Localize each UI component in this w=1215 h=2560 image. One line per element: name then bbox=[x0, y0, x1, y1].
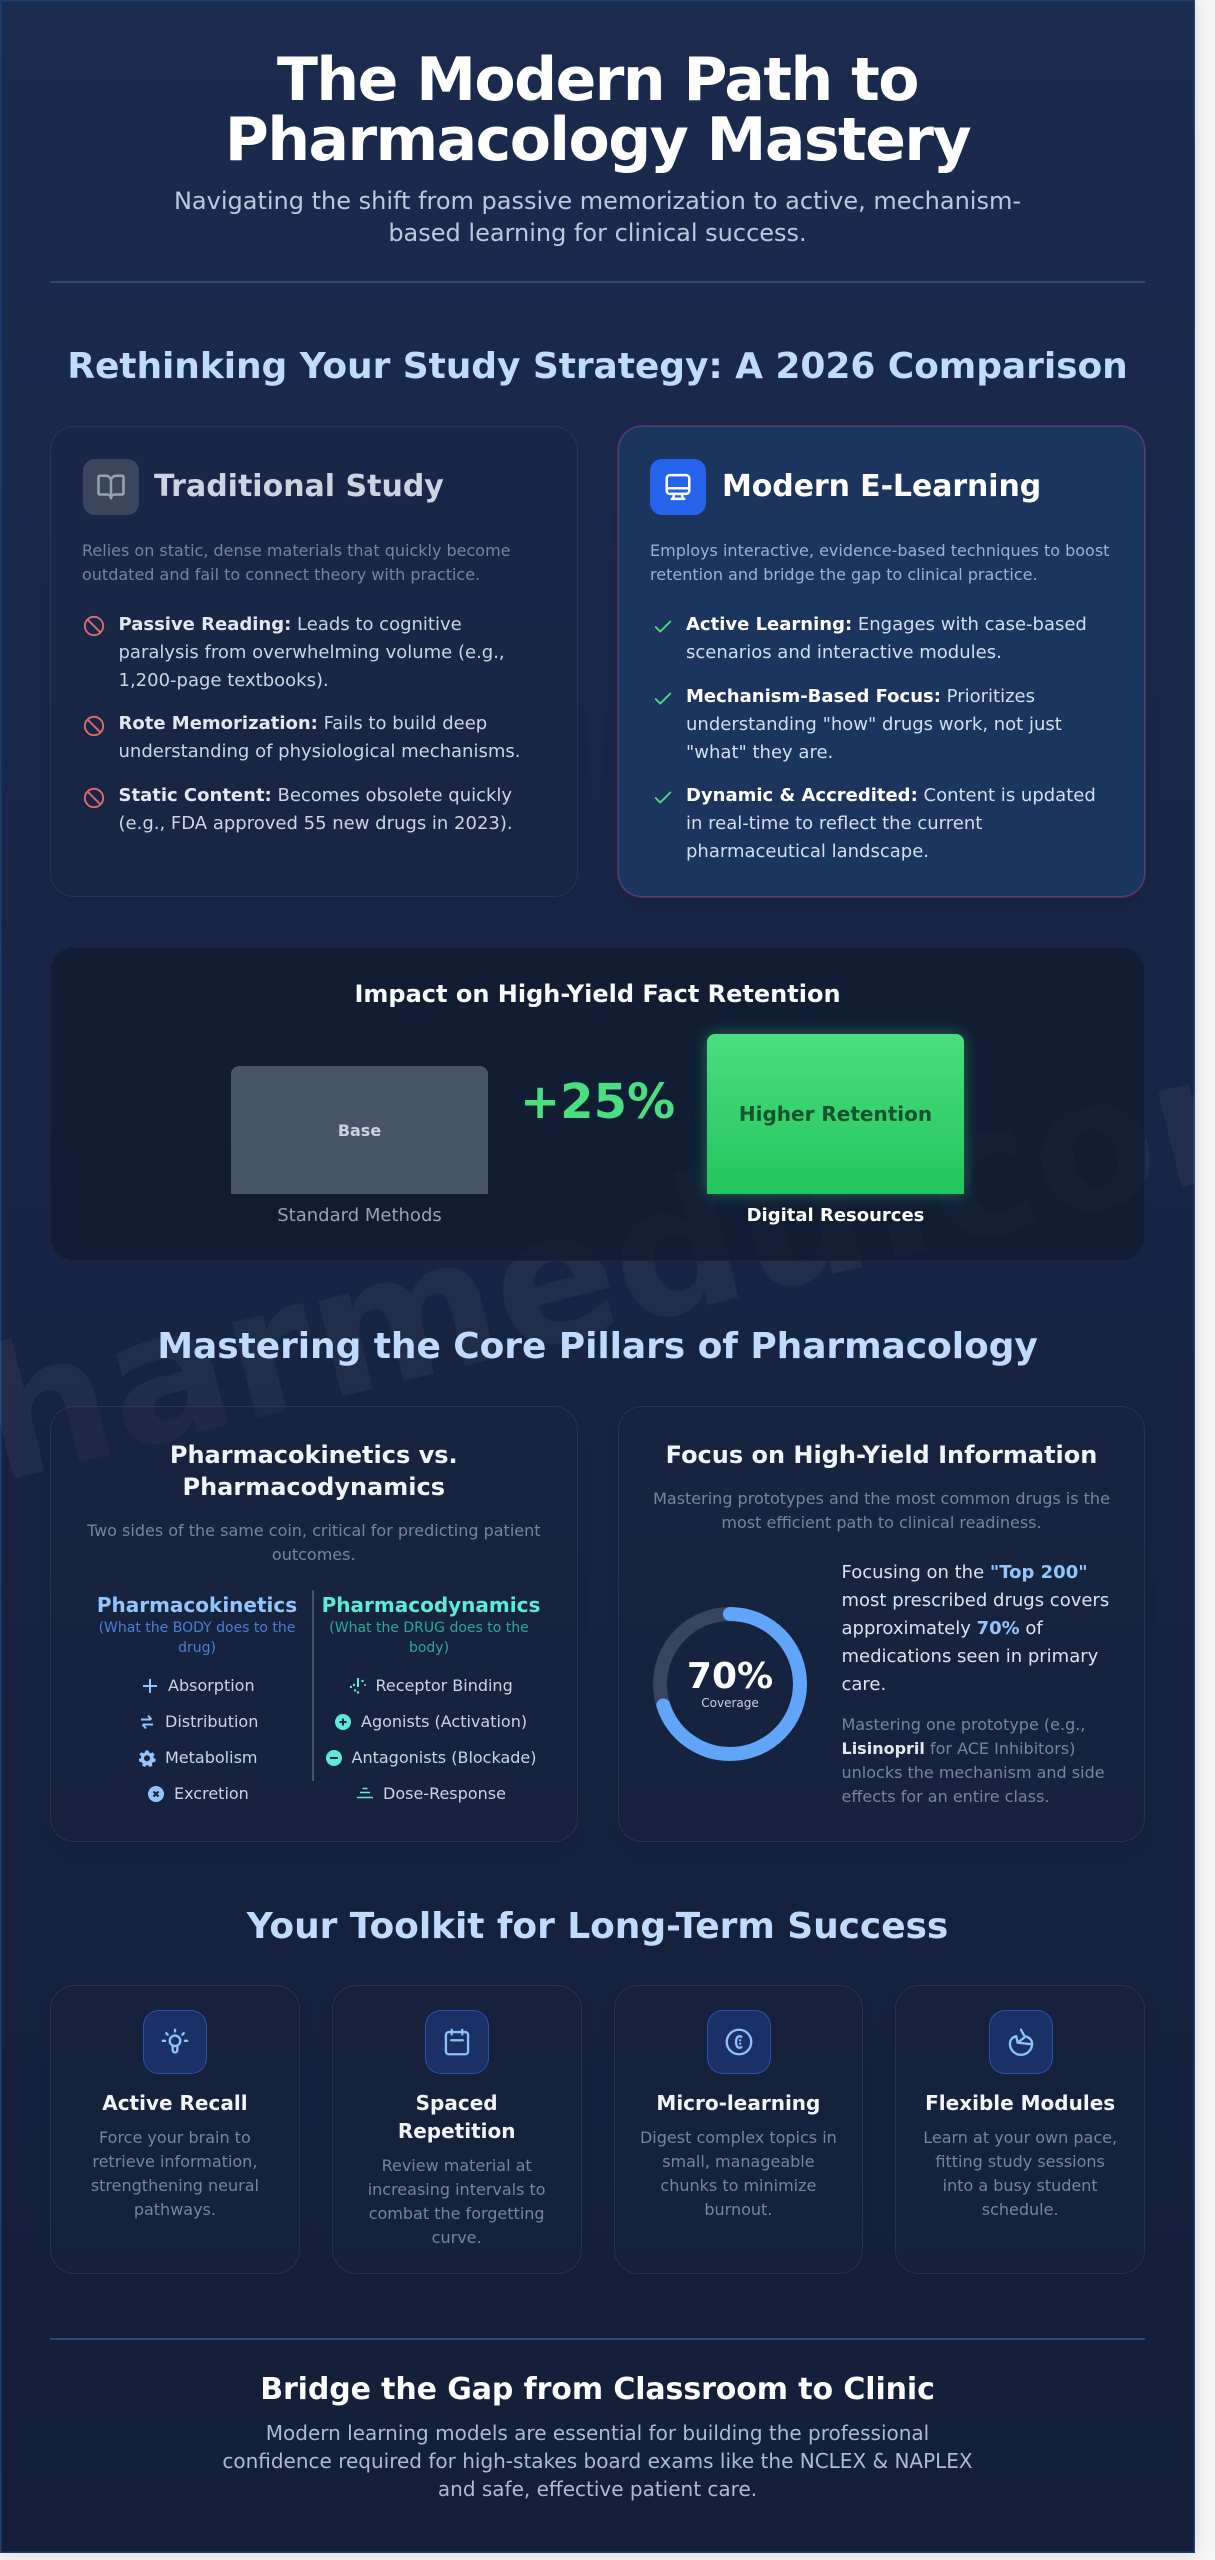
item: agonists: Agonists (Activation) bbox=[361, 1712, 527, 1730]
heading: core pillars: Mastering the Core Pillars of Pharmacology bbox=[157, 1326, 1038, 1366]
title: micro-learning: Micro-learning bbox=[656, 2090, 820, 2114]
item: excretion: Excretion bbox=[174, 1784, 249, 1802]
text: active recall: pathways. bbox=[134, 2200, 216, 2218]
list item: active learning bbox=[686, 614, 1087, 662]
icon: ban 1 bbox=[84, 616, 104, 636]
panel: traditional study bbox=[50, 426, 578, 897]
title: spaced repetition bbox=[398, 2090, 515, 2142]
title: spaced repetition: Spaced bbox=[416, 2090, 498, 2114]
text: pd subtitle: (What the DRUG does to the bbox=[329, 1620, 529, 1636]
title: Pharmacology Mastery bbox=[225, 104, 970, 174]
text: micro-learning: Digest complex topics in bbox=[640, 2128, 837, 2146]
heading: study strategy comparison: Rethinking Your Study Strategy: A 2026 Comparison bbox=[67, 346, 1128, 386]
icon: check 1 bbox=[654, 620, 672, 632]
text: top 200: most prescribed drugs covers bbox=[842, 1590, 1109, 1610]
axis label: standard methods: Standard Methods bbox=[277, 1205, 442, 1226]
subtitle: Navigating the shift from passive memorization to active, mechanism- bbox=[174, 187, 1021, 215]
bar label: base: Base bbox=[338, 1121, 381, 1140]
icon: monitor bbox=[650, 459, 706, 515]
title: flexible modules: Flexible Modules bbox=[925, 2090, 1115, 2114]
heading: toolkit: Your Toolkit for Long-Term Success bbox=[247, 1906, 948, 1946]
list item: mechanism-based focus bbox=[686, 686, 1062, 762]
list item: rote memorization bbox=[118, 712, 520, 762]
text: top 200: Focusing on the "Top 200" bbox=[842, 1562, 1088, 1582]
item: distribution: Distribution bbox=[165, 1712, 258, 1730]
text: micro-learning: small, manageable bbox=[662, 2152, 815, 2170]
footer text: confidence required for high-stakes board exams like the NCLEX & NAPLEX bbox=[222, 2449, 973, 2473]
text: micro-learning: chunks to minimize bbox=[660, 2176, 816, 2194]
text: top 200: approximately 70% of bbox=[842, 1618, 1043, 1638]
title: The Modern Path to bbox=[277, 44, 918, 114]
card: active recall bbox=[50, 1985, 300, 2274]
title: active recall: Active Recall bbox=[102, 2090, 248, 2114]
list item: active learning: scenarios and interactive modules. bbox=[686, 642, 1002, 662]
text: flexible modules: into a busy student bbox=[943, 2176, 1098, 2194]
list item: static content: (e.g., FDA approved 55 new drugs in 2023). bbox=[118, 812, 513, 834]
heading: traditional study: Traditional Study bbox=[154, 469, 444, 504]
item: dose-response: Dose-Response bbox=[383, 1784, 506, 1802]
text: pd subtitle bbox=[329, 1620, 529, 1656]
text: high-yield description bbox=[653, 1488, 1110, 1532]
text: pk vs pd description: outcomes. bbox=[272, 1544, 356, 1564]
panel: high-yield information bbox=[618, 1406, 1145, 1842]
text: top 200: care. bbox=[842, 1674, 886, 1694]
list item: passive reading: paralysis from overwhelming volume (e.g., bbox=[118, 642, 505, 662]
bar label: higher retention: Higher Retention bbox=[739, 1102, 932, 1126]
footer text: Modern learning models are essential for building the professional bbox=[266, 2421, 929, 2445]
column: pharmacokinetics bbox=[97, 1592, 297, 1802]
list item: static content bbox=[118, 784, 513, 834]
list item: dynamic and accredited bbox=[686, 784, 1096, 862]
text: flexible modules: Learn at your own pace, bbox=[923, 2128, 1117, 2146]
list item: mechanism-based focus: Mechanism-Based Focus: Prioritizes bbox=[686, 686, 1035, 706]
list item: mechanism-based focus: "what" they are. bbox=[686, 742, 833, 762]
footer text bbox=[222, 2421, 973, 2501]
text: high-yield description: Mastering prototypes and the most common drugs is the bbox=[653, 1488, 1110, 1508]
text: high-yield description: most efficient path to clinical readiness. bbox=[721, 1512, 1042, 1532]
text: modern description bbox=[650, 541, 1109, 584]
card: micro-learning bbox=[614, 1985, 863, 2274]
text: prototype note: Mastering one prototype (e.g., bbox=[842, 1714, 1085, 1734]
list item: dynamic and accredited: pharmaceutical landscape. bbox=[686, 840, 929, 862]
panel: modern e-learning bbox=[618, 426, 1145, 897]
list item: mechanism-based focus: understanding "how" drugs work, not just bbox=[686, 714, 1062, 734]
heading: modern e-learning: Modern E-Learning bbox=[722, 469, 1041, 504]
text: spaced repetition: increasing intervals to bbox=[368, 2180, 546, 2198]
text: modern description: retention and bridge the gap to clinical practice. bbox=[650, 565, 1038, 584]
text: active recall bbox=[91, 2128, 259, 2218]
text: active recall: strengthening neural bbox=[91, 2176, 259, 2194]
list item: dynamic and accredited: in real-time to reflect the current bbox=[686, 812, 982, 834]
column: pharmacodynamics bbox=[322, 1592, 540, 1802]
icon: ban 3 bbox=[84, 788, 104, 808]
text: micro-learning bbox=[640, 2128, 837, 2218]
card: spaced repetition bbox=[332, 1985, 582, 2274]
panel: retention chart bbox=[50, 947, 1145, 1261]
title: spaced repetition: Repetition bbox=[398, 2118, 515, 2142]
text: pk vs pd description: Two sides of the same coin, critical for predicting patient bbox=[87, 1520, 541, 1540]
card: flexible modules bbox=[895, 1985, 1145, 2274]
footer text: and safe, effective patient care. bbox=[438, 2477, 757, 2501]
text: prototype note: unlocks the mechanism and side bbox=[842, 1762, 1105, 1782]
list item: passive reading: 1,200-page textbooks). bbox=[118, 670, 329, 690]
text: traditional description bbox=[82, 541, 511, 584]
bar: digital resources bbox=[707, 1034, 964, 1194]
text: flexible modules: fitting study sessions bbox=[935, 2152, 1105, 2170]
list item: rote memorization: understanding of physiological mechanisms. bbox=[118, 740, 520, 762]
list item: passive reading bbox=[118, 614, 505, 690]
bar: standard methods bbox=[231, 1066, 488, 1194]
text: pk subtitle: drug) bbox=[178, 1640, 216, 1656]
icon: open book bbox=[83, 459, 139, 515]
text: spaced repetition: curve. bbox=[432, 2228, 482, 2246]
axis label: digital resources: Digital Resources bbox=[747, 1205, 924, 1226]
subtitle bbox=[174, 187, 1021, 247]
stat: 70%: 70% bbox=[687, 1656, 773, 1697]
stat: +25%: +25% bbox=[520, 1074, 675, 1130]
item: absorption: Absorption bbox=[168, 1676, 255, 1694]
text: traditional description: outdated and fail to connect theory with practice. bbox=[82, 565, 480, 584]
panel: pharmacokinetics vs pharmacodynamics bbox=[50, 1406, 578, 1842]
icon: check 2 bbox=[654, 692, 672, 704]
text: pk subtitle bbox=[99, 1620, 295, 1656]
icon: flexible dial bbox=[989, 2010, 1053, 2074]
text: active recall: Force your brain to bbox=[99, 2128, 251, 2146]
list item: static content: Static Content: Becomes obsolete quickly bbox=[118, 784, 512, 806]
heading: high-yield information: Focus on High-Yield Information bbox=[666, 1440, 1097, 1468]
text: modern description: Employs interactive, evidence-based techniques to boost bbox=[650, 541, 1109, 560]
item: antagonists: Antagonists (Blockade) bbox=[352, 1748, 537, 1766]
subtitle: based learning for clinical success. bbox=[388, 219, 807, 247]
text: pd subtitle: body) bbox=[409, 1640, 449, 1656]
icon: coin bbox=[707, 2010, 771, 2074]
heading: pk vs pd bbox=[170, 1440, 458, 1500]
text: prototype note bbox=[842, 1714, 1105, 1806]
icon: check 3 bbox=[654, 792, 672, 804]
heading: pk vs pd: Pharmacodynamics bbox=[183, 1472, 445, 1500]
footer heading: Bridge the Gap from Classroom to Clinic bbox=[260, 2372, 935, 2406]
text: spaced repetition bbox=[368, 2156, 546, 2246]
donut chart: 70% coverage bbox=[653, 1607, 807, 1761]
icon: ban 2 bbox=[84, 716, 104, 736]
item: metabolism: Metabolism bbox=[165, 1748, 257, 1766]
list item: passive reading: Passive Reading: Leads to cognitive bbox=[118, 614, 462, 634]
text: prototype note: Lisinopril for ACE Inhibitors) bbox=[842, 1738, 1075, 1758]
heading: pharmacokinetics: Pharmacokinetics bbox=[97, 1592, 297, 1616]
text: spaced repetition: Review material at bbox=[382, 2156, 532, 2174]
list item: dynamic and accredited: Dynamic & Accredited: Content is updated bbox=[686, 784, 1096, 806]
heading: pk vs pd: Pharmacokinetics vs. bbox=[170, 1440, 458, 1468]
text: top 200: medications seen in primary bbox=[842, 1646, 1098, 1666]
text: top 200 bbox=[842, 1562, 1109, 1694]
icon: light bulb bbox=[143, 2010, 207, 2074]
heading: retention chart: Impact on High-Yield Fact Retention bbox=[354, 980, 841, 1008]
text: pk subtitle: (What the BODY does to the bbox=[99, 1620, 295, 1636]
text: traditional description: Relies on static, dense materials that quickly become bbox=[82, 541, 511, 560]
text: flexible modules bbox=[923, 2128, 1117, 2218]
label: coverage: Coverage bbox=[701, 1696, 759, 1710]
text: active recall: retrieve information, bbox=[92, 2152, 257, 2170]
heading: pharmacodynamics: Pharmacodynamics bbox=[322, 1592, 540, 1616]
text: pk vs pd description bbox=[86, 1520, 541, 1564]
text: spaced repetition: combat the forgetting bbox=[369, 2204, 545, 2222]
text: micro-learning: burnout. bbox=[704, 2200, 772, 2218]
title bbox=[225, 44, 970, 174]
item: receptor binding: Receptor Binding bbox=[376, 1676, 513, 1694]
text: flexible modules: schedule. bbox=[982, 2200, 1059, 2218]
text: prototype note: effects for an entire class. bbox=[842, 1786, 1049, 1806]
icon: calendar bbox=[425, 2010, 489, 2074]
list item: active learning: Active Learning: Engages with case-based bbox=[686, 614, 1087, 634]
list item: rote memorization: Rote Memorization: Fails to build deep bbox=[118, 712, 487, 734]
